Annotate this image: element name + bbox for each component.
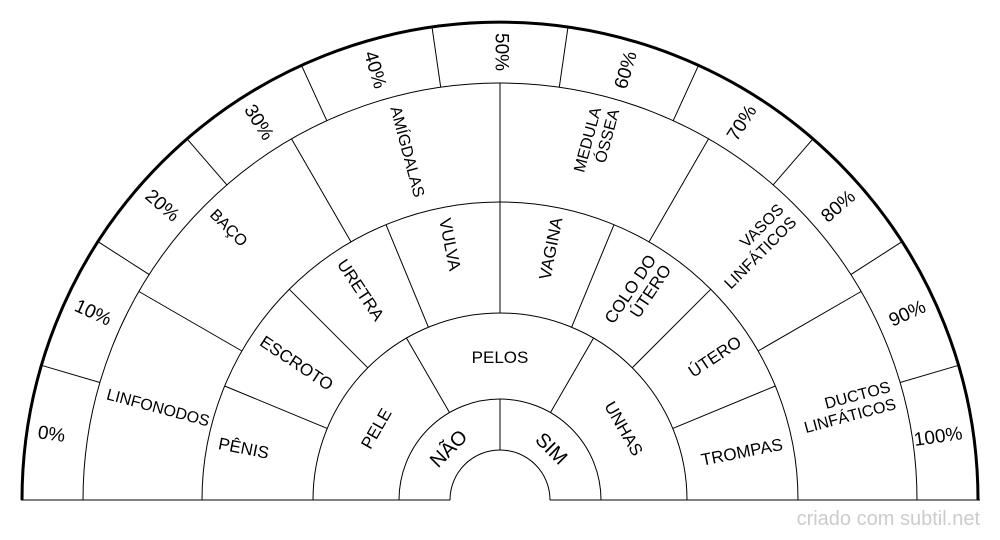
ring 3 labels: genital organs <box>217 215 784 470</box>
ring 4 labels: lymphatic organs: MEDULA <box>571 105 605 174</box>
percentage scale labels: 80% <box>817 186 860 227</box>
ring 3 labels: genital organs: ÚTERO <box>626 261 675 321</box>
percentage scale labels: 20% <box>141 186 183 226</box>
percentage scale labels: 60% <box>611 49 642 91</box>
ring 1 labels: yes and no <box>425 425 571 472</box>
ring outlines <box>83 83 917 500</box>
ring 2 labels: skin and appendages: PELE <box>357 405 396 452</box>
ring 4 labels: lymphatic organs: LINFÁTICOS <box>802 394 898 437</box>
percentage scale labels: 30% <box>239 101 278 144</box>
ring 4 labels: lymphatic organs: ÓSSEA <box>591 106 623 165</box>
percentage scale labels: 100% <box>913 423 964 451</box>
ring 3 labels: genital organs: ÚTERO <box>685 332 745 381</box>
ring 2 labels: skin and appendages: UNHAS <box>600 398 647 459</box>
percentage scale labels: 50% <box>490 33 511 71</box>
ring 2 labels: skin and appendages: PELOS <box>472 348 528 367</box>
ring 4 labels: lymphatic organs: LINFÁTICOS <box>720 213 800 293</box>
watermark: criado com subtil.net <box>797 508 980 530</box>
ring 4 labels: lymphatic organs: DUCTOS <box>823 379 892 413</box>
percentage scale labels: 90% <box>886 297 929 331</box>
ring 4 labels: lymphatic organs: AMÍGDALAS <box>386 104 429 199</box>
ring 3 labels: genital organs: TROMPAS <box>699 435 784 470</box>
ring 3 labels: genital organs: ESCROTO <box>256 332 337 395</box>
percentage scale labels: 0% <box>36 422 67 447</box>
baseline <box>21 499 980 501</box>
ring 4 labels: lymphatic organs <box>105 104 898 437</box>
ring 3 labels: genital organs: COLO DO <box>601 251 660 327</box>
percentage scale labels: 70% <box>723 101 762 145</box>
ring 4 labels: lymphatic organs: BAÇO <box>206 206 250 250</box>
ring 1 labels: yes and no: NÃO <box>425 425 472 472</box>
sector dividers <box>41 27 959 450</box>
ring 3 labels: genital organs: PÊNIS <box>217 434 271 463</box>
percentage scale labels: 40% <box>359 49 390 91</box>
percentage scale labels <box>36 33 964 451</box>
ring 3 labels: genital organs: VAGINA <box>536 215 567 281</box>
percentage scale labels: 10% <box>71 296 115 331</box>
ring 3 labels: genital organs: URETRA <box>333 256 388 325</box>
ring 3 labels: genital organs: VULVA <box>435 217 464 273</box>
ring 4 labels: lymphatic organs: VASOS <box>737 201 788 251</box>
ring 2 labels: skin and appendages <box>357 348 647 459</box>
ring 4 labels: lymphatic organs: LINFONODOS <box>105 387 211 430</box>
ring 1 labels: yes and no: SIM <box>531 429 571 469</box>
